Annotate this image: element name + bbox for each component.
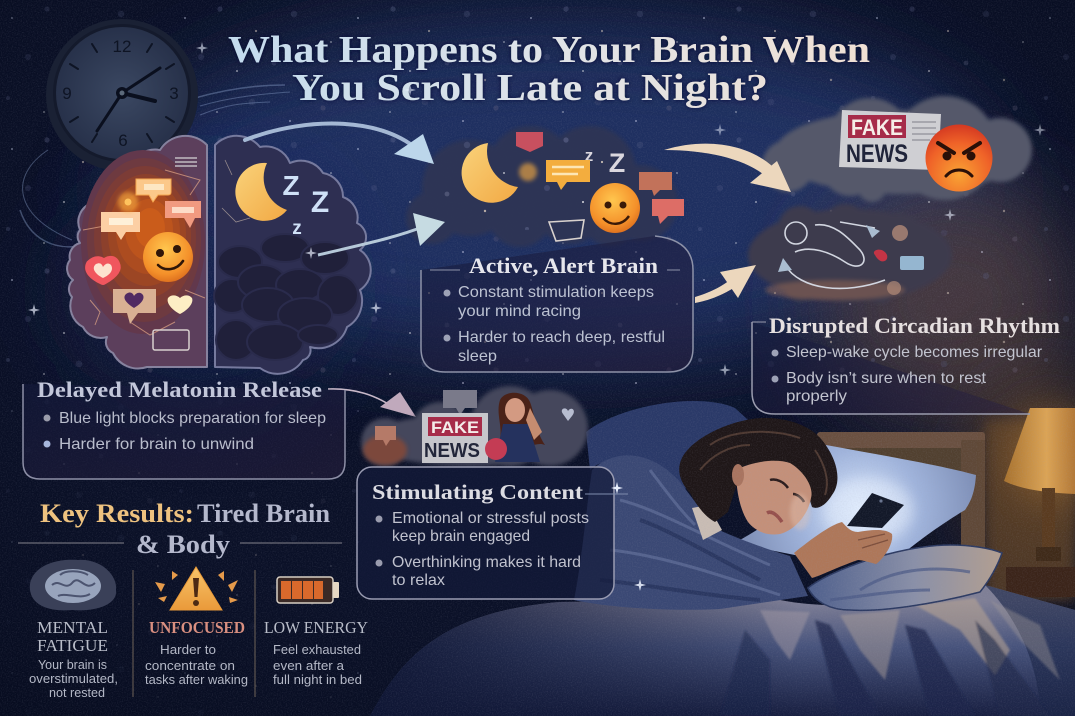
icon: battery	[277, 577, 339, 603]
result: unfocused: Harder to	[160, 642, 216, 657]
pillows	[734, 445, 1002, 610]
sleep z letters: Z	[609, 148, 625, 178]
icon: tired brain cloud	[30, 560, 116, 610]
thought cloud: active brain	[406, 126, 684, 247]
panel: active alert brain: sleep	[458, 348, 497, 365]
result: mental fatigue: not rested	[49, 685, 105, 700]
influencer portrait	[485, 393, 545, 462]
small bubble	[639, 172, 672, 196]
result: unfocused: concentrate on	[145, 658, 235, 673]
panel: active alert brain: your mind racing	[458, 303, 581, 320]
panel: disrupted circadian rhythm: Sleep-wake cycle becomes irregular	[786, 344, 1043, 361]
sleep z letters	[585, 146, 625, 178]
lower bedding	[370, 585, 1075, 716]
heading: key results: & Body	[136, 530, 230, 559]
thought cloud: circadian rhythm loops	[748, 204, 952, 303]
heading: key results: Key Results:	[40, 499, 194, 528]
newspaper sign: FAKE	[851, 115, 903, 140]
result: unfocused: tasks after waking	[145, 672, 248, 687]
heading: key results	[18, 499, 342, 559]
thought cloud: fake news and anger	[762, 96, 1032, 202]
small fake news sign: FAKE	[431, 418, 479, 437]
result: mental fatigue: Your brain is	[38, 657, 107, 672]
newspaper sign	[839, 110, 941, 170]
result: unfocused	[145, 567, 248, 687]
arrow: brain to active brain (lower)	[318, 213, 445, 255]
panel: stimulating content: Stimulating Content	[372, 480, 583, 504]
result: mental fatigue: MENTAL	[37, 618, 108, 637]
panel: stimulating content: to relax	[392, 572, 445, 589]
swirling light trails behind clock	[20, 85, 290, 247]
woman's hair	[679, 418, 837, 522]
panel: disrupted circadian rhythm: Body isn’t sure when to rest	[786, 370, 987, 387]
thought cloud: stimulating content	[361, 386, 588, 466]
result: unfocused: UNFOCUSED	[149, 618, 245, 637]
panel: stimulating content: Overthinking makes it hard	[392, 554, 581, 571]
brain right half: z	[292, 218, 302, 239]
heading: key results: Tired Brain	[197, 499, 331, 528]
title	[228, 29, 870, 109]
blanket hump	[586, 401, 770, 490]
panel: active alert brain: Active, Alert Brain	[469, 253, 658, 278]
bedroom scene	[370, 401, 1075, 716]
brain left half	[67, 136, 207, 368]
brain: overstimulated and sleepy halves	[67, 136, 371, 374]
heart bubble	[516, 132, 543, 152]
icon: wall clock: 6	[118, 131, 128, 150]
panel: active alert brain: Harder to reach deep, restful	[458, 329, 665, 346]
result: low energy: Feel exhausted	[273, 642, 361, 657]
panel: stimulating content: Emotional or stressful posts	[392, 510, 589, 527]
angry emoji	[926, 124, 992, 192]
panel: active alert brain	[421, 236, 693, 372]
result: low energy	[264, 577, 368, 687]
small fake news sign: NEWS	[424, 440, 480, 462]
arrow: active brain to fake news	[664, 144, 791, 192]
phone and hand	[794, 493, 904, 578]
icon: wall clock: 3	[169, 84, 179, 103]
message bubble	[519, 160, 590, 190]
panel: delayed melatonin release: Delayed Melatonin Release	[37, 377, 322, 402]
small fake news sign	[422, 413, 488, 463]
result: mental fatigue: overstimulated,	[29, 671, 118, 686]
moon	[462, 143, 518, 203]
smiling emoji	[590, 183, 640, 233]
result: mental fatigue: FATIGUE	[37, 636, 108, 655]
cup outline	[549, 220, 584, 241]
arrow: active brain to circadian	[695, 265, 756, 303]
woman's face	[732, 461, 812, 534]
panel: disrupted circadian rhythm: properly	[786, 388, 847, 405]
panel: stimulating content	[357, 467, 628, 599]
shirt	[692, 505, 722, 540]
sparkle stars	[28, 42, 1046, 591]
sleep z letters: z	[585, 146, 593, 165]
brain right half	[214, 136, 371, 374]
newspaper sign: NEWS	[846, 140, 908, 168]
result: low energy: full night in bed	[273, 672, 362, 687]
panel: delayed melatonin release: Harder for brain to unwind	[59, 436, 254, 453]
panel: active alert brain: Constant stimulation keeps	[458, 284, 654, 301]
icon: warning triangle	[155, 567, 238, 610]
panel: disrupted circadian rhythm: Disrupted Circadian Rhythm	[769, 313, 1060, 338]
brain right half: Z	[311, 186, 329, 219]
sleeve	[574, 455, 808, 610]
panel: delayed melatonin release: Blue light blocks preparation for sleep	[59, 410, 326, 427]
title: You Scroll Late at Night?	[292, 67, 768, 109]
title: What Happens to Your Brain When	[228, 29, 870, 71]
arrow: melatonin to stimulating content	[328, 389, 416, 417]
arrow: brain to active brain (upper)	[245, 124, 434, 164]
icon: wall clock: 12	[113, 37, 131, 56]
panel: stimulating content: keep brain engaged	[392, 528, 530, 545]
bedside lamp	[1004, 408, 1075, 597]
wall and headboard	[817, 420, 1075, 600]
icon: wall clock: 9	[62, 84, 72, 103]
column dividers	[133, 570, 255, 697]
panel: disrupted circadian rhythm	[752, 313, 1060, 414]
brain right half: Z	[282, 170, 300, 201]
result: mental fatigue	[29, 560, 118, 700]
pink bubble	[652, 199, 684, 224]
panel: delayed melatonin release	[23, 377, 345, 479]
result: low energy: LOW ENERGY	[264, 618, 368, 637]
result: low energy: even after a	[273, 658, 345, 673]
icon: wall clock	[46, 19, 198, 171]
